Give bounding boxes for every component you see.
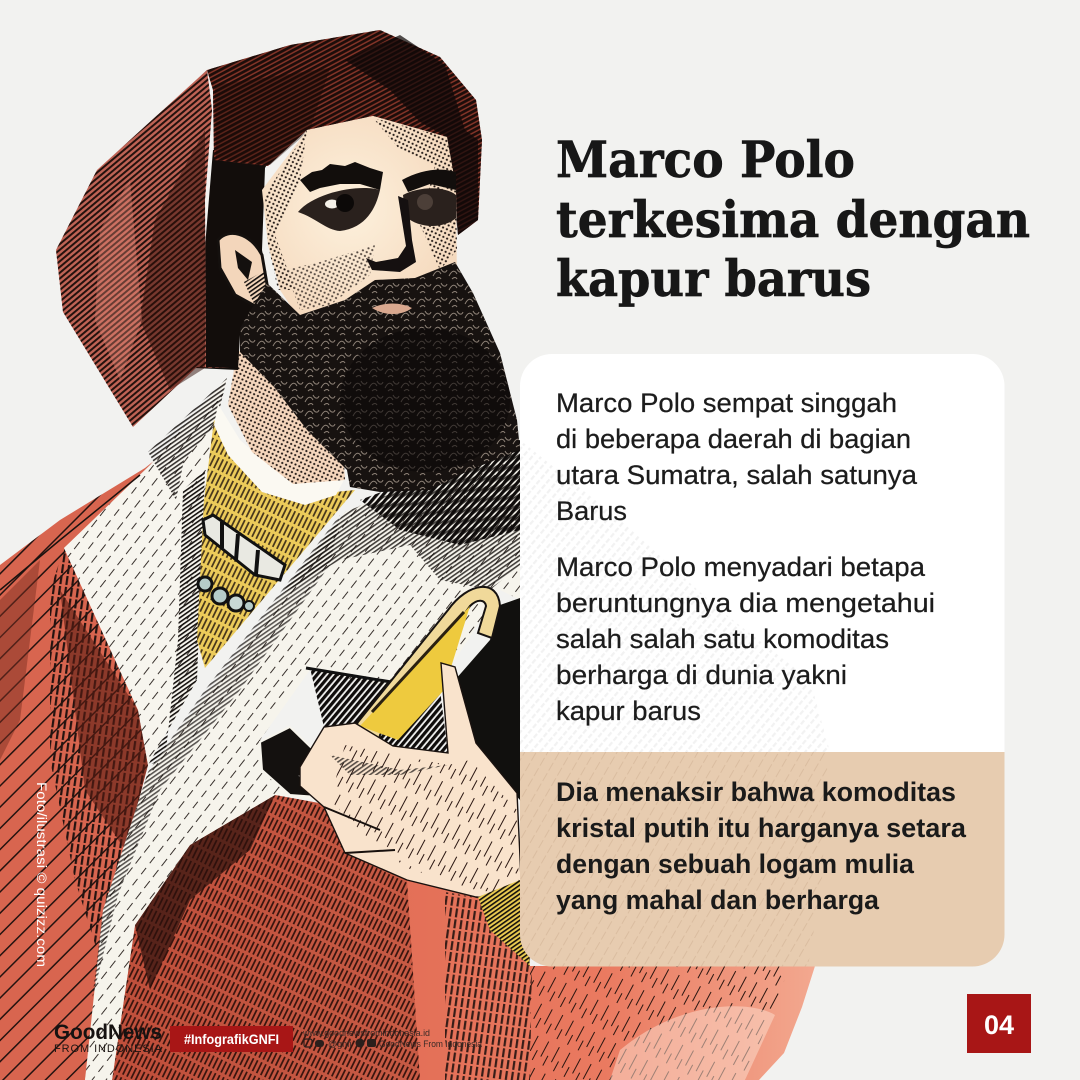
panel: text card: [520, 354, 1005, 967]
highlighted paragraph: yang mahal dan berharga: [556, 885, 880, 915]
robe: left sleeve: [0, 440, 180, 1080]
ghost of illustration under tan section: [520, 752, 828, 966]
hand holding book: [300, 663, 522, 900]
title: Marco Polo: [556, 130, 855, 189]
logo: GoodNews From Indonesia: GoodNews: [54, 1021, 162, 1044]
footer branding: [54, 1021, 483, 1055]
ear: [218, 233, 268, 306]
photo credit: Foto/ilustrasi © quizizz.com: [34, 782, 49, 967]
hood drape: [56, 70, 230, 427]
yellow cuff below hand: [478, 880, 530, 966]
ghost of illustration under white section: [520, 440, 830, 752]
paragraph two: berharga di dunia yakni: [556, 660, 847, 690]
face: [262, 116, 457, 320]
hashtag tag: [170, 1026, 293, 1052]
paragraph one: utara Sumatra, salah satunya: [556, 460, 918, 490]
page number badge: [967, 994, 1031, 1053]
golden book clasp: [335, 587, 500, 790]
fur collar: left lapel: [64, 378, 227, 765]
white shirt collar: [214, 404, 345, 505]
book cover and dark sleeve: [260, 598, 520, 800]
paragraph two: beruntungnya dia mengetahui: [556, 588, 935, 618]
paragraph one: Marco Polo sempat singgah: [556, 388, 897, 418]
website and social handles: @gnfi: [328, 1039, 352, 1049]
paragraph two: salah salah satu komoditas: [556, 624, 889, 654]
paragraph one: di beberapa daerah di bagian: [556, 424, 911, 454]
paragraph two: kapur barus: [556, 696, 701, 726]
dark hair behind ear: [195, 150, 275, 370]
paragraph one: Barus: [556, 496, 627, 526]
hashtag tag: #InfografikGNFI: [184, 1032, 279, 1047]
website and social handles: [302, 1028, 483, 1050]
card: tan highlight section: [520, 752, 1005, 967]
cap wrapped on head: [207, 30, 482, 235]
title: terkesima dengan: [556, 190, 1030, 249]
highlighted paragraph: Dia menaksir bahwa komoditas: [556, 777, 956, 807]
neck: [228, 340, 345, 484]
paragraph two: Marco Polo menyadari betapa: [556, 552, 926, 582]
eyebrows: [300, 162, 456, 192]
card: white section: [520, 354, 1004, 752]
jewelled necklace: [198, 515, 285, 611]
robe stray lines at shoulder: [0, 475, 140, 590]
eyes: [298, 188, 456, 231]
logo: GoodNews From Indonesia: [54, 1021, 163, 1055]
beard: [240, 262, 520, 492]
highlighted paragraph: kristal putih itu harganya setara: [556, 813, 967, 843]
website and social handles: www.goodnewsfromindonesia.id: [302, 1028, 430, 1038]
yellow vest: [197, 420, 355, 668]
nose shadow: [366, 196, 416, 272]
highlighted paragraph: dengan sebuah logam mulia: [556, 849, 915, 879]
logo: GoodNews From Indonesia: FROM INDONESIA: [54, 1043, 163, 1055]
white front lapel: [85, 440, 520, 1080]
website and social handles: GoodNews From Indonesia: [379, 1039, 483, 1050]
robe: lower front and hem: [112, 795, 815, 1080]
illustration: Marco Polo engraving: [0, 30, 815, 1080]
title: kapur barus: [556, 249, 871, 308]
page number badge: 04: [984, 1010, 1014, 1040]
